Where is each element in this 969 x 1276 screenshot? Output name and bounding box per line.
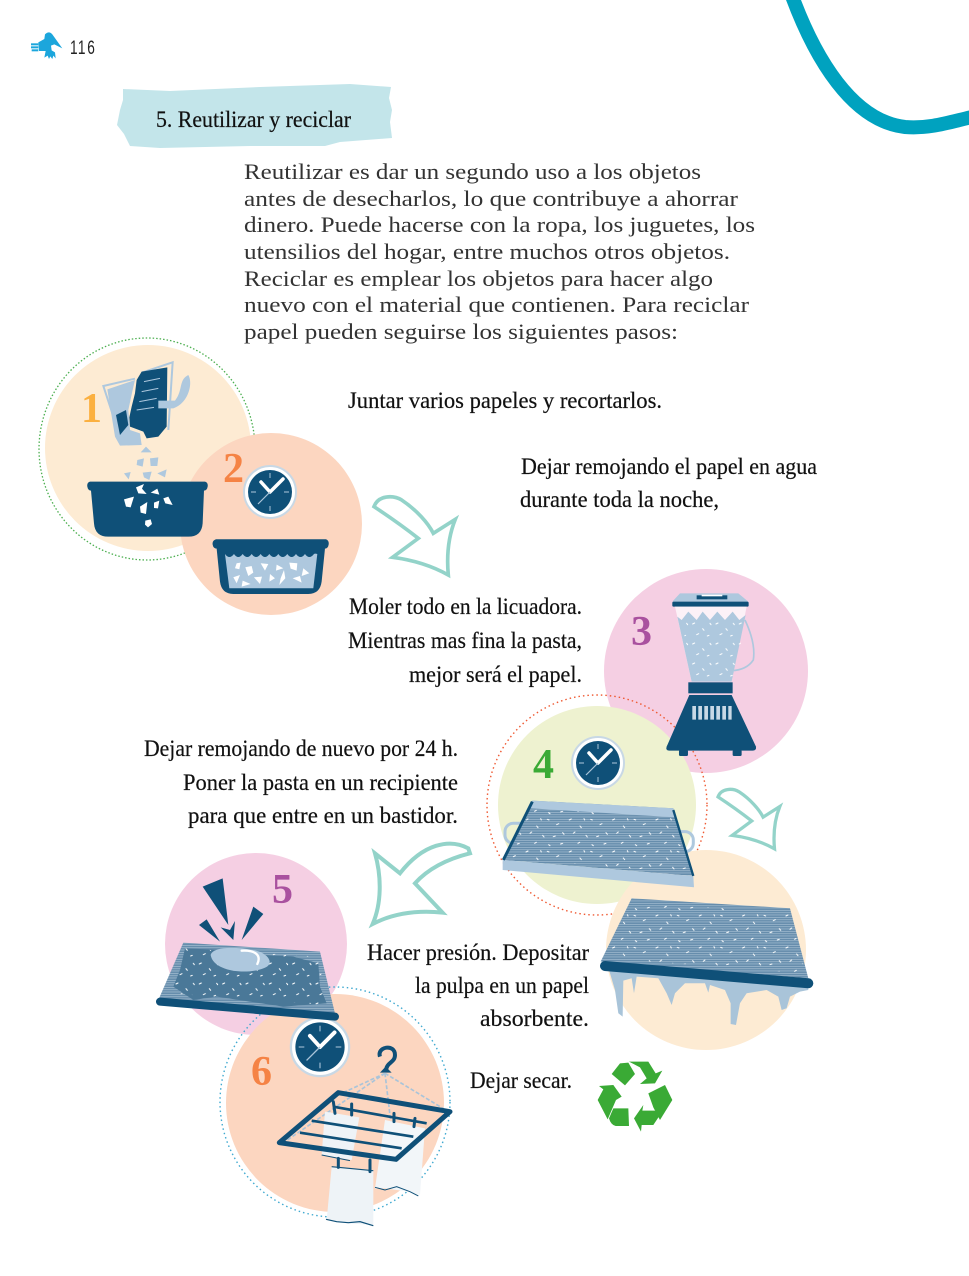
icon: hanger hook [285, 1048, 448, 1157]
heading text: 5. Reutilizar y reciclar [156, 107, 351, 132]
caption: step 4: Dejar remojando de nuevo por 24 h. [144, 736, 458, 761]
caption: step 2: Dejar remojando el papel en agua [521, 454, 817, 479]
icon: clock [572, 737, 624, 789]
panel: step 2 soak [180, 433, 362, 615]
caption: step 5 [367, 940, 589, 1031]
icon: tray with drips [601, 898, 808, 1025]
caption: step 6: Dejar secar. [470, 1068, 572, 1093]
page number: 116 [70, 37, 95, 59]
intro text block: Reciclar es emplear los objetos para hacer algo [244, 266, 713, 291]
step number 2: 2 [223, 446, 244, 492]
arrow: step 3 to lifted tray [718, 789, 780, 849]
dotted ring [220, 987, 450, 1217]
step 1 circle [45, 345, 251, 551]
panel: lifted tray dripping [601, 850, 808, 1050]
caption: step 4: Poner la pasta en un recipiente [183, 770, 458, 795]
caption: step 3: Moler todo en la licuadora. [349, 594, 582, 619]
page number logo [31, 32, 95, 59]
icon: bowl with paper [87, 482, 208, 537]
step 6 circle [226, 994, 444, 1212]
step number 3: 3 [631, 609, 652, 655]
caption: step 3 [348, 594, 582, 687]
icon: glyph bird [31, 32, 62, 59]
intro text block: antes de desecharlos, lo que contribuye a ahorrar [244, 186, 739, 211]
icon: hands tearing paper [103, 362, 190, 480]
caption: step 4 [144, 736, 458, 828]
step 5 circle [165, 853, 347, 1035]
tray circle [606, 850, 806, 1050]
dotted ring [39, 338, 255, 560]
intro text block: nuevo con el material que contienen. Para reciclar [244, 292, 750, 317]
arrow: step 4 to step 5 [373, 844, 470, 924]
step 4 circle [498, 706, 696, 904]
intro text block: dinero. Puede hacerse con la ropa, los juguetes, los [244, 212, 755, 237]
panel: step 1 tear paper [39, 338, 255, 560]
caption: step 3: Mientras mas fina la pasta, [348, 628, 582, 653]
icon: pressed pulp on tray [158, 878, 335, 1017]
step 3 circle [604, 569, 808, 773]
caption: step 2: durante toda la noche, [520, 487, 719, 512]
icon: recycle symbol [598, 1062, 672, 1132]
heading brush background [117, 84, 392, 148]
step 2 circle [180, 433, 362, 615]
dotted ring [487, 695, 707, 915]
icon: mould tray in water [503, 801, 694, 887]
step number 5: 5 [272, 867, 293, 913]
panel: step 3 blender [604, 569, 808, 773]
icon: drying rack with paper sheets [279, 1093, 450, 1226]
panel: step 4 soak again [487, 695, 707, 915]
step number 1: 1 [81, 386, 102, 432]
caption: step 1: Juntar varios papeles y recortarlos. [348, 388, 662, 413]
arrow: step 2 to 3 [374, 497, 455, 575]
caption: step 5: absorbente. [480, 1006, 589, 1031]
intro text block [244, 159, 755, 344]
caption: step 3: mejor será el papel. [409, 662, 582, 687]
intro text block: papel pueden seguirse los siguientes pasos: [244, 319, 678, 344]
caption: step 4: para que entre en un bastidor. [188, 803, 458, 828]
decorative teal swoosh [792, 0, 969, 127]
icon: bowl with water [213, 539, 329, 594]
panel: step 6 dry [220, 987, 450, 1226]
caption: step 2 [520, 454, 817, 512]
intro text block: utensilios del hogar, entre muchos otros objetos. [244, 239, 730, 264]
panel: step 5 press [165, 853, 347, 1035]
step number 6: 6 [251, 1049, 272, 1095]
caption: step 5: la pulpa en un papel [415, 973, 589, 998]
icon: blender [666, 593, 756, 756]
icon: clock [244, 466, 296, 518]
icon: clock [291, 1018, 349, 1076]
section heading [117, 84, 392, 148]
caption: step 5: Hacer presión. Depositar [367, 940, 589, 965]
step number 4: 4 [533, 742, 554, 788]
intro text block: Reutilizar es dar un segundo uso a los objetos [244, 159, 701, 184]
